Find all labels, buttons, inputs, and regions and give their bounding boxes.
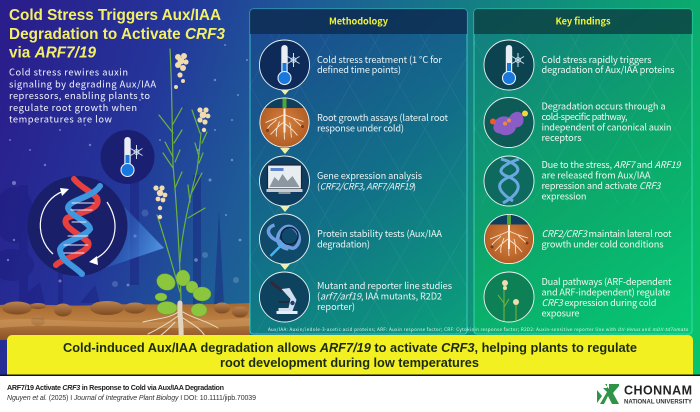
key findings text: independent of canonical auxin <box>542 120 672 134</box>
soil ground <box>0 301 250 340</box>
key findings text: Dual pathways (ARF-dependent <box>542 274 672 288</box>
footer citation <box>7 383 256 402</box>
key findings text: are released from Aux/IAA <box>542 168 651 182</box>
intro text: signaling by degrading Aux/IAA <box>9 76 156 90</box>
rosette leaves <box>154 270 211 316</box>
key findings text: CRF3 expression during cold <box>542 295 656 309</box>
footer citation: ARF7/19 Activate CRF3 in Response to Cold via Aux/IAA Degradation <box>7 383 224 392</box>
key findings header: Key findings <box>556 14 611 28</box>
panel: key findings <box>474 9 692 334</box>
intro text: temperatures are low <box>9 112 113 126</box>
snow particles <box>7 29 248 287</box>
key findings header <box>474 9 692 34</box>
rotation arrows <box>40 191 115 260</box>
icon: DNA <box>484 156 534 206</box>
forest silhouettes <box>0 175 224 310</box>
logo: Chonnam National University: NATIONAL UNIVERSITY <box>624 400 692 406</box>
footnote abbreviations: Aux/IAA: Auxin/indole-3-acetic acid proteins; ARF: Auxin response factor; CRF: Cytokinin response factor; R2D2: Auxin-sensitive reporter line with DII-Venus and mDII-tdTomato <box>268 326 689 333</box>
methodology text: Cold stress treatment (1 °C for <box>317 52 442 66</box>
key findings text <box>542 52 682 320</box>
icon: root <box>258 96 310 148</box>
conclusion banner <box>7 335 693 375</box>
key findings text: CRF2/CRF3 maintain lateral root <box>542 226 672 240</box>
intro text: repressors, enabling plants to <box>9 88 150 102</box>
icon: thermometer <box>484 40 534 90</box>
title: via ARF7/19 <box>9 44 96 62</box>
methodology text: Protein stability tests (Aux/IAA <box>317 226 442 240</box>
title: Cold Stress Triggers Aux/IAA <box>9 7 221 24</box>
connector arrows <box>280 89 290 270</box>
footer citation: Nguyen et al. (2025) I Journal of Integrative Plant Biology I DOI: 10.1111/jipb.70039 <box>7 395 256 402</box>
key findings text: expression <box>542 188 586 202</box>
DNA helix <box>56 179 100 274</box>
key findings text: and ARF-independent) regulate <box>542 284 670 298</box>
key findings text: Degradation occurs through a <box>542 98 666 112</box>
plant <box>143 49 218 340</box>
conclusion banner: root development during low temperatures <box>220 355 479 370</box>
key findings text: degradation of Aux/IAA proteins <box>542 62 674 76</box>
flower clusters <box>153 53 210 219</box>
icon: protein complex <box>484 98 534 148</box>
roots <box>143 303 218 340</box>
title: Degradation to Activate CRF3 <box>9 26 225 43</box>
methodology text: response under cold) <box>317 120 404 134</box>
icon: root <box>483 213 535 264</box>
key findings text: Due to the stress, ARF7 and ARF19 <box>542 157 682 171</box>
icon: thermometer <box>260 40 310 90</box>
intro text: regulate root growth when <box>9 100 137 114</box>
zoom beam <box>105 190 164 268</box>
icon: protein magnifier <box>260 214 310 264</box>
icon: computer chart <box>260 156 310 206</box>
intro text: Cold stress rewires auxin <box>9 64 128 78</box>
stems <box>157 49 207 300</box>
key findings text: Cold stress rapidly triggers <box>542 52 652 66</box>
methodology text: degradation) <box>317 236 370 250</box>
methodology text: (CRF2/CRF3, ARF7/ARF19) <box>317 180 416 192</box>
methodology text: Mutant and reporter line studies <box>317 278 452 292</box>
key findings text: repression and activate CRF3 <box>542 178 661 192</box>
methodology text: reporter) <box>317 299 355 313</box>
logo: Chonnam National University: CHONNAM <box>624 384 692 398</box>
panel: methodology <box>250 9 467 334</box>
key findings text: growth under cold conditions <box>542 236 664 250</box>
methodology header <box>250 9 467 34</box>
methodology text: Gene expression analysis <box>317 168 422 182</box>
icon: microscope <box>260 272 310 322</box>
DNA circle <box>28 176 128 276</box>
key findings text: receptors <box>542 130 582 144</box>
title <box>9 7 225 62</box>
icon: plants <box>484 272 534 322</box>
methodology text: (arf7/arf19, IAA mutants, R2D2 <box>317 288 442 302</box>
intro text <box>9 64 156 126</box>
logo: Chonnam National University <box>597 384 692 406</box>
thermometer circle <box>100 130 154 184</box>
key findings text: cold-specific pathway, <box>542 109 628 123</box>
methodology text <box>317 52 452 313</box>
key findings text: exposure <box>542 306 580 320</box>
conclusion banner: Cold-induced Aux/IAA degradation allows ARF7/19 to activate CRF3, helping plants to regulate <box>63 340 637 355</box>
methodology header: Methodology <box>329 14 389 28</box>
methodology text: defined time points) <box>317 62 401 76</box>
methodology text: Root growth assays (lateral root <box>317 110 449 124</box>
